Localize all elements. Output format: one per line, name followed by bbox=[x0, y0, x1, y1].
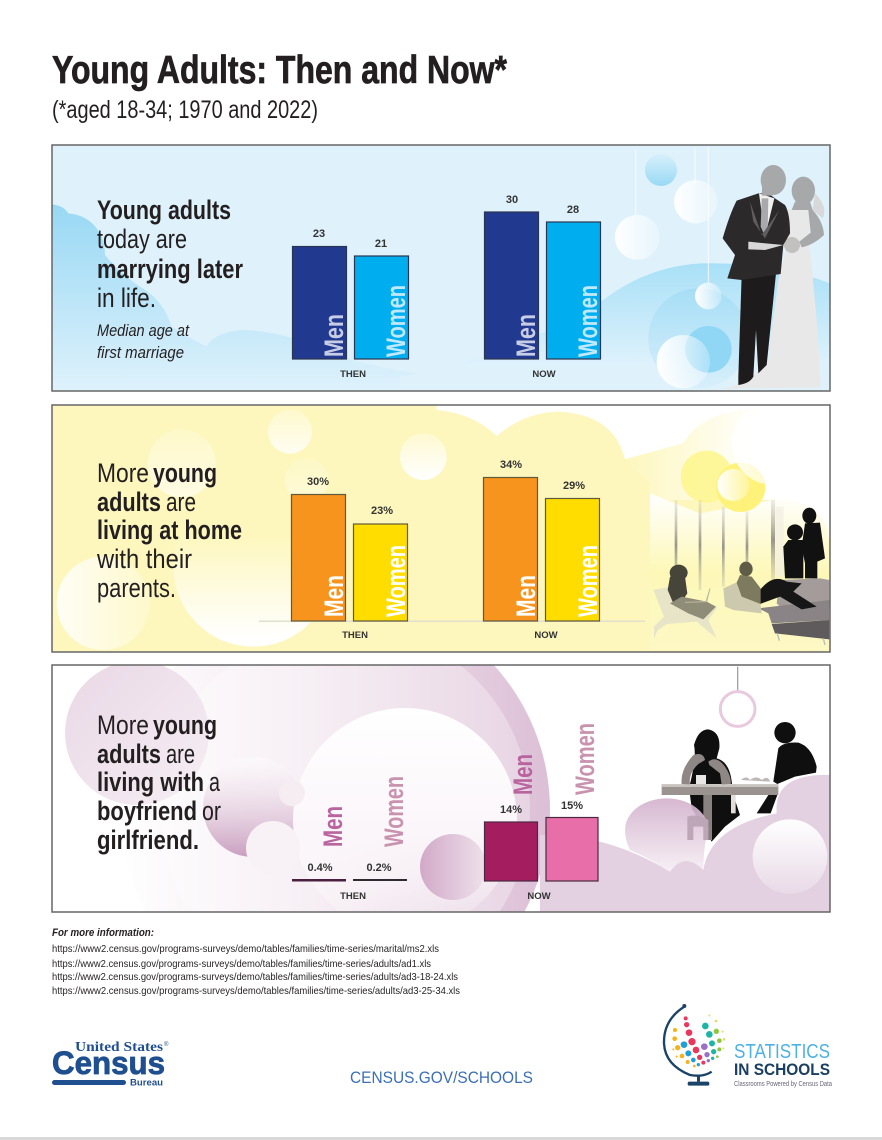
heading: living with partner: a bbox=[209, 767, 221, 797]
bar chart: living at home: 30% bbox=[307, 476, 329, 488]
heading: living with partner: girlfriend. bbox=[97, 825, 199, 855]
panel border bbox=[52, 665, 830, 912]
panel border bbox=[52, 145, 830, 391]
bar chart: living with partner: Men bbox=[508, 754, 538, 795]
bar chart: living with partner bbox=[292, 723, 600, 902]
website link: CENSUS.GOV/SCHOOLS bbox=[350, 1068, 533, 1087]
heading: living at home: adults bbox=[97, 487, 161, 517]
panel 1 background shapes bbox=[50, 147, 830, 393]
bar chart: living at home: Men bbox=[511, 575, 541, 617]
sources: https://www2.census.gov/programs-surveys/demo/tables/families/time-series/marital/ms2.xls bbox=[52, 943, 439, 955]
panel: marrying later bbox=[50, 145, 830, 393]
bar chart: median age: 28 bbox=[567, 204, 579, 216]
logo: statistics in schools: STATISTICS bbox=[734, 1041, 830, 1063]
sources: https://www2.census.gov/programs-surveys/demo/tables/families/time-series/adults/ad3-18-24.xls bbox=[52, 971, 458, 983]
panel border bbox=[52, 405, 830, 652]
sources: For more information: bbox=[52, 927, 154, 939]
bar chart: living with partner: Women bbox=[570, 723, 600, 795]
panel: living at home bbox=[52, 402, 832, 652]
bar chart: living with partner: 14% bbox=[500, 804, 522, 816]
icon: bride and groom bbox=[720, 165, 824, 389]
panel: living with partner bbox=[51, 664, 831, 913]
heading: marrying later: today are bbox=[97, 224, 187, 254]
foreground clouds bbox=[540, 775, 830, 917]
heading: living with partner: adults bbox=[97, 739, 161, 769]
heading: living with partner: or bbox=[202, 796, 221, 826]
bar chart: living at home: Women bbox=[381, 545, 411, 617]
heading: living at home: young bbox=[153, 458, 217, 488]
heading: marrying later bbox=[97, 195, 243, 313]
bar chart: median age: 21 bbox=[375, 238, 387, 250]
icon: globe bbox=[664, 1004, 725, 1086]
logo: statistics in schools: IN SCHOOLS bbox=[734, 1060, 830, 1079]
heading: living with partner: boyfriend bbox=[97, 796, 197, 826]
bar chart: living at home: Women bbox=[573, 545, 603, 617]
heading: living with partner: are bbox=[166, 739, 195, 769]
bar chart: median age: 30 bbox=[506, 194, 518, 206]
bar chart: median age: Men bbox=[319, 314, 349, 357]
heading: living with partner: More bbox=[97, 710, 149, 740]
heading: living with partner bbox=[97, 710, 221, 855]
bar chart: living with partner: 15% bbox=[561, 800, 583, 812]
bar chart: median age: Men bbox=[511, 314, 541, 357]
title: Young Adults: Then and Now* bbox=[52, 49, 508, 92]
bar chart: living at home: 29% bbox=[563, 480, 585, 492]
logo: statistics in schools bbox=[664, 1004, 832, 1088]
logo: census bureau: United States bbox=[75, 1040, 164, 1055]
bar chart: living at home bbox=[259, 459, 645, 641]
bar chart: median age bbox=[292, 194, 603, 380]
icon: family in living room bbox=[653, 508, 829, 645]
heading: living at home: parents. bbox=[97, 573, 176, 603]
bar chart: living with partner: NOW bbox=[527, 891, 551, 902]
panel 2 background shapes bbox=[57, 402, 832, 650]
logo: census bureau: Census bbox=[52, 1045, 165, 1081]
page edge bbox=[0, 1137, 882, 1140]
heading: living at home: with their bbox=[96, 544, 192, 574]
logo: census bureau: ® bbox=[164, 1041, 169, 1048]
bar chart: living at home: Men bbox=[319, 575, 349, 617]
bar chart: living with partner: 0.2% bbox=[366, 862, 392, 874]
bar chart: living with partner: Men bbox=[318, 806, 348, 847]
bar chart: living with partner: 0.4% bbox=[307, 862, 333, 874]
heading: living at home: living at home bbox=[97, 515, 242, 545]
bar chart: living at home: NOW bbox=[534, 630, 558, 641]
bar chart: median age: 23 bbox=[313, 228, 325, 240]
note: median age: Median age at bbox=[97, 321, 190, 340]
heading: living at home: More bbox=[97, 458, 149, 488]
bar chart: living with partner: THEN bbox=[340, 891, 366, 902]
bar chart: median age: Women bbox=[573, 285, 603, 357]
note: median age: first marriage bbox=[97, 343, 184, 362]
bar chart: living at home: THEN bbox=[342, 630, 368, 641]
icon: couple at table bbox=[662, 667, 817, 842]
heading: marrying later: marrying later bbox=[97, 254, 243, 284]
bar chart: living with partner: Women bbox=[379, 776, 409, 847]
bar chart: median age: Women bbox=[381, 285, 411, 357]
logo: census bureau: Bureau bbox=[130, 1078, 163, 1088]
sources bbox=[52, 927, 460, 997]
bar chart: living at home: 34% bbox=[500, 459, 522, 471]
heading: living at home: are bbox=[166, 487, 196, 517]
heading: marrying later: Young adults bbox=[97, 195, 231, 225]
subtitle: (*aged 18-34; 1970 and 2022) bbox=[52, 96, 318, 124]
heading: living with partner: young bbox=[153, 710, 217, 740]
logo: statistics in schools: Classrooms Powered by Census Data bbox=[734, 1081, 832, 1088]
heading: living at home bbox=[96, 458, 242, 603]
panel 3 background shapes bbox=[65, 666, 550, 912]
bar chart: living at home: 23% bbox=[371, 505, 393, 517]
sources: https://www2.census.gov/programs-surveys/demo/tables/families/time-series/adults/ad1.xls bbox=[52, 958, 431, 970]
note: median age bbox=[97, 321, 190, 362]
bar chart: median age: NOW bbox=[532, 369, 556, 380]
sources: https://www2.census.gov/programs-surveys/demo/tables/families/time-series/adults/ad3-25-34.xls bbox=[52, 985, 460, 997]
heading: living with partner: living with bbox=[97, 767, 204, 797]
bar chart: median age: THEN bbox=[340, 369, 366, 380]
heading: marrying later: in life. bbox=[97, 283, 156, 313]
